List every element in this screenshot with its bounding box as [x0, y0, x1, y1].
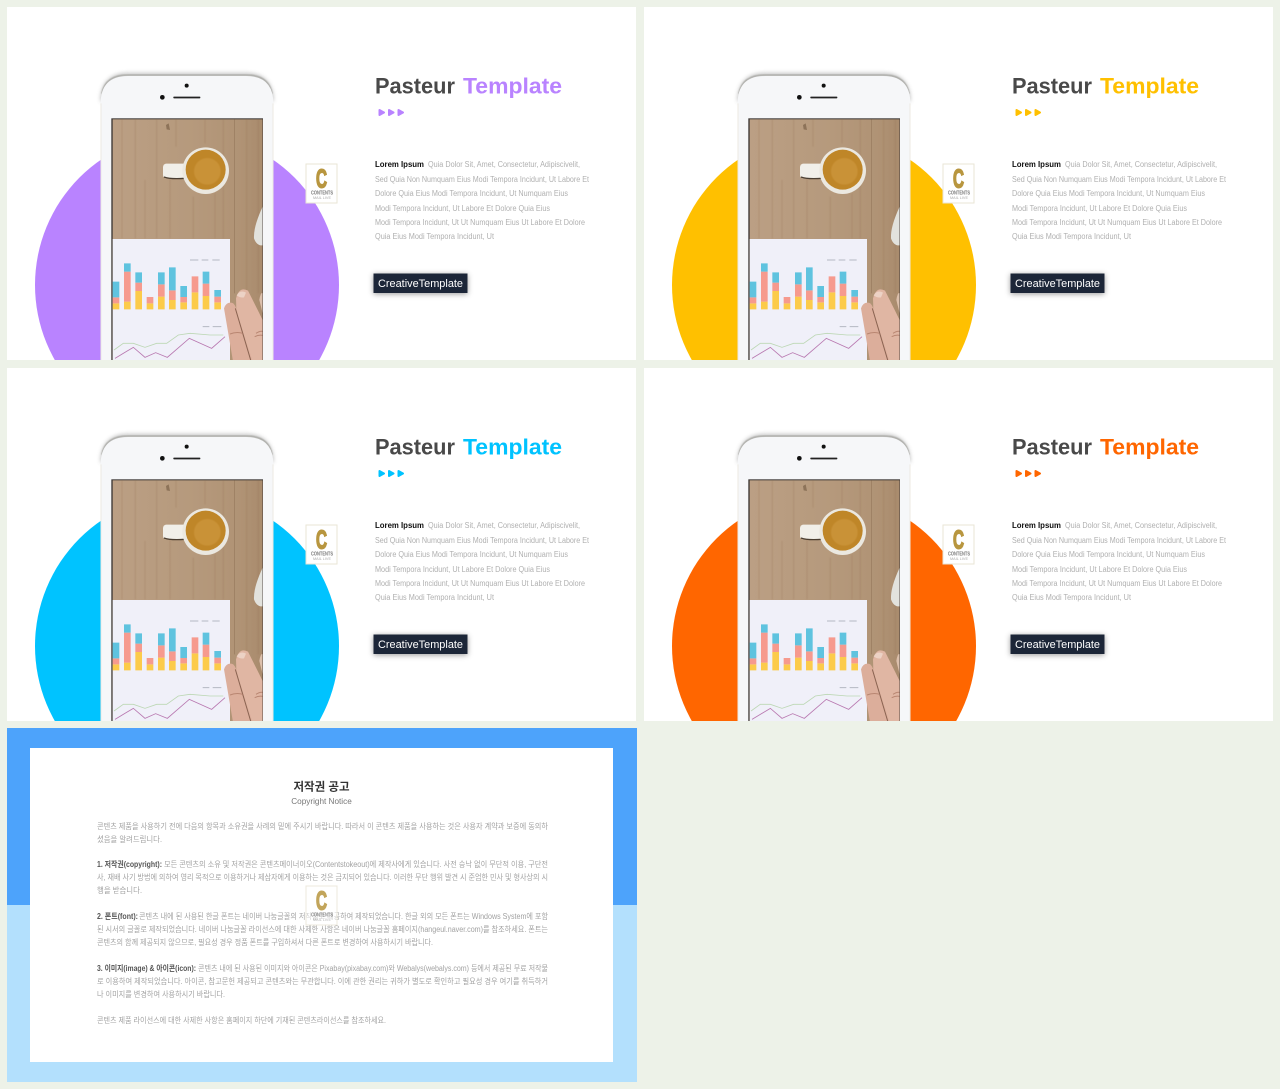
body text: Modi Tempora Incidunt, Ut Ut Numquam Eius Ut Labore Et Dolore [1012, 218, 1222, 227]
notice intro: 콘텐츠 제품을 사용하기 전에 다음의 항목과 소유권을 사례의 밑에 주시기 바랍니다. 따라서 이 콘텐츠 제품을 사용하는 것은 사용자 계약과 보증에 동의하 [97, 821, 549, 831]
section 3: image and icon: 로 이용하여 제작되었습니다. 아이콘, 참고문헌 제공되고 콘텐츠와는 무관합니다. 이에 관한 권리는 귀하가 별도로 확인하고 필요성 경우 여기를 취득하거 [97, 976, 548, 986]
button: CreativeTemplate [1015, 278, 1100, 290]
button: CreativeTemplate [378, 278, 463, 290]
phone on cyan circle [35, 432, 339, 721]
section 3: image and icon: 콘텐츠 내에 된 사용된 이미지와 아이콘은 Pixabay(pixabay.com)와 Webalys(webalys.com) 등에서 제공된 무료 저작물 [198, 963, 548, 973]
button: CreativeTemplate [378, 639, 463, 651]
body text: Modi Tempora Incidunt, Ut Ut Numquam Eius Ut Labore Et Dolore [375, 218, 585, 227]
section 3: image and icon: 3. 이미지(image) & 아이콘(icon): [97, 963, 196, 973]
logo stamp: C [316, 524, 327, 554]
logo stamp: CONTENTS [948, 552, 971, 558]
logo stamp: CONTENTS [311, 912, 334, 918]
body text: Dolore Quia Eius Modi Tempora Incidunt, Ut Numquam Eius [1012, 550, 1205, 559]
section 3: image and icon: 나 이미지를 변경하여 사용하시기 바랍니다. [97, 989, 225, 999]
body text: Dolore Quia Eius Modi Tempora Incidunt, Ut Numquam Eius [375, 189, 568, 198]
body text: Lorem Ipsum [375, 160, 424, 169]
logo stamp: MAIL LIVE [950, 557, 969, 561]
notice heading: 저작권 공고 [293, 780, 350, 794]
body text: Sed Quia Non Numquam Eius Modi Tempora Incidunt, Ut Labore Et [1012, 175, 1227, 184]
body text: Lorem Ipsum [1012, 160, 1061, 169]
section 2: font: 2. 폰트(font): [97, 912, 138, 921]
section 1: copyright: 모든 콘텐츠의 소유 및 저작권은 콘텐츠메이너이오(Contentstokeout)에 제작사에게 있습니다. 사전 승낙 없이 무단적 이용, 구단전 [164, 859, 548, 869]
body text: Lorem Ipsum [1012, 521, 1061, 530]
logo stamp: C [953, 164, 964, 194]
panel: cyan slide [7, 368, 636, 721]
body text [1012, 521, 1227, 602]
logo stamp: MAIL LIVE [313, 918, 332, 922]
button [1010, 274, 1104, 293]
title: Pasteur [375, 434, 455, 460]
logo stamp: MAIL LIVE [313, 196, 332, 200]
logo stamp [306, 886, 337, 925]
body text [1012, 160, 1227, 241]
arrows [1016, 471, 1040, 476]
logo stamp: CONTENTS [311, 552, 334, 558]
title: Template [463, 74, 562, 98]
body text: Quia Dolor Sit, Amet, Consectetur, Adipiscivelit, [1065, 160, 1217, 169]
body text: Modi Tempora Incidunt, Ut Ut Numquam Eius Ut Labore Et Dolore [375, 579, 585, 588]
section 1: copyright: 행을 받습니다. [97, 885, 142, 895]
notice intro [97, 821, 549, 844]
title: Pasteur [1012, 74, 1092, 98]
title [375, 434, 562, 460]
logo stamp: C [953, 524, 964, 554]
body text: Modi Tempora Incidunt, Ut Ut Numquam Eius Ut Labore Et Dolore [1012, 579, 1222, 588]
arrows [380, 471, 403, 476]
phone on orange circle [672, 432, 976, 721]
closing line: 콘텐츠 제품 라이선스에 대한 사제한 사항은 홈페이지 하단에 기재된 콘텐츠라이선스를 참조하세요. [97, 1015, 386, 1025]
section 3: image and icon [97, 963, 548, 999]
section 1: copyright: 1. 저작권(copyright): [97, 859, 162, 869]
body text: Dolore Quia Eius Modi Tempora Incidunt, Ut Numquam Eius [375, 550, 568, 559]
body text: Modi Tempora Incidunt, Ut Labore Et Dolore Quia Eius [375, 565, 550, 574]
section 2: font: 된 시서의 글꼴로 제작되었습니다. 네이버 나눔글꼴 라이선스에 대한 사제한 사항은 네이버 나눔글꼴 홈페이지(hangeul.naver.com)를 참조하세요. 폰트는 [97, 924, 548, 934]
logo stamp: MAIL LIVE [950, 196, 969, 200]
body text: Quia Eius Modi Tempora Incidunt, Ut [1012, 232, 1132, 241]
notice intro: 셨음을 알려드립니다. [97, 834, 162, 844]
body text: Dolore Quia Eius Modi Tempora Incidunt, Ut Numquam Eius [1012, 189, 1205, 198]
logo stamp: CONTENTS [948, 190, 971, 196]
button: CreativeTemplate [1015, 639, 1100, 651]
arrows [380, 110, 403, 115]
title [375, 74, 562, 98]
notice heading [291, 780, 352, 806]
arrows [1016, 110, 1040, 115]
body text: Quia Dolor Sit, Amet, Consectetur, Adipiscivelit, [428, 160, 580, 169]
section 1: copyright: 사, 재배 사기 방법에 의하여 영리 목적으로 이용하거나 제삼자에게 이용하는 것은 금지되어 있습니다. 이러한 무단 행위 발견 시 준엄한 민사 및 형사상의 시 [97, 872, 548, 882]
body text: Modi Tempora Incidunt, Ut Labore Et Dolore Quia Eius [375, 204, 550, 213]
body text [375, 160, 590, 241]
panel: orange slide [644, 368, 1273, 721]
notice heading: Copyright Notice [291, 797, 352, 806]
panel: yellow slide [644, 7, 1273, 360]
logo stamp [943, 164, 974, 203]
body text: Quia Eius Modi Tempora Incidunt, Ut [375, 232, 495, 241]
body text: Quia Dolor Sit, Amet, Consectetur, Adipiscivelit, [428, 521, 580, 530]
phone on yellow circle [672, 70, 976, 360]
section 2: font: 콘텐츠 내에 된 사용된 한글 폰트는 네이버 나눔글꼴의 저작물로 제공하여 제작되었습니다. 한글 외의 모든 폰트는 Windows System에 포함 [139, 911, 549, 921]
body text: Modi Tempora Incidunt, Ut Labore Et Dolore Quia Eius [1012, 565, 1187, 574]
title: Template [1100, 74, 1199, 98]
body text: Modi Tempora Incidunt, Ut Labore Et Dolore Quia Eius [1012, 204, 1187, 213]
panel: copyright notice [7, 728, 637, 1082]
body text: Sed Quia Non Numquam Eius Modi Tempora Incidunt, Ut Labore Et [375, 536, 590, 545]
title: Pasteur [375, 74, 455, 98]
phone on purple circle [35, 70, 339, 360]
body text: Quia Dolor Sit, Amet, Consectetur, Adipiscivelit, [1065, 521, 1217, 530]
body text [375, 521, 590, 602]
body text: Lorem Ipsum [375, 521, 424, 530]
panel: purple slide [7, 7, 636, 360]
section 1: copyright [97, 859, 548, 895]
body text: Quia Eius Modi Tempora Incidunt, Ut [375, 593, 495, 602]
title: Template [463, 434, 562, 460]
logo stamp: MAIL LIVE [313, 557, 332, 561]
body text: Sed Quia Non Numquam Eius Modi Tempora Incidunt, Ut Labore Et [375, 175, 590, 184]
logo stamp [943, 524, 974, 564]
logo stamp: C [316, 164, 327, 194]
title [1012, 434, 1199, 460]
button [374, 274, 468, 293]
button [1010, 634, 1104, 654]
title [1012, 74, 1199, 98]
logo stamp: C [316, 886, 327, 916]
body text: Sed Quia Non Numquam Eius Modi Tempora Incidunt, Ut Labore Et [1012, 536, 1227, 545]
section 2: font: 콘텐츠의 함께 제공되지 않으므로, 필요성 경우 정품 폰트를 구입하셔서 다른 폰트로 변경하여 사용하시기 바랍니다. [97, 937, 433, 947]
logo stamp [306, 524, 337, 564]
logo stamp: CONTENTS [311, 190, 334, 196]
logo stamp [306, 164, 337, 203]
button [374, 634, 468, 654]
title: Pasteur [1012, 434, 1092, 460]
body text: Quia Eius Modi Tempora Incidunt, Ut [1012, 593, 1132, 602]
title: Template [1100, 434, 1199, 460]
section 2: font [97, 911, 549, 947]
